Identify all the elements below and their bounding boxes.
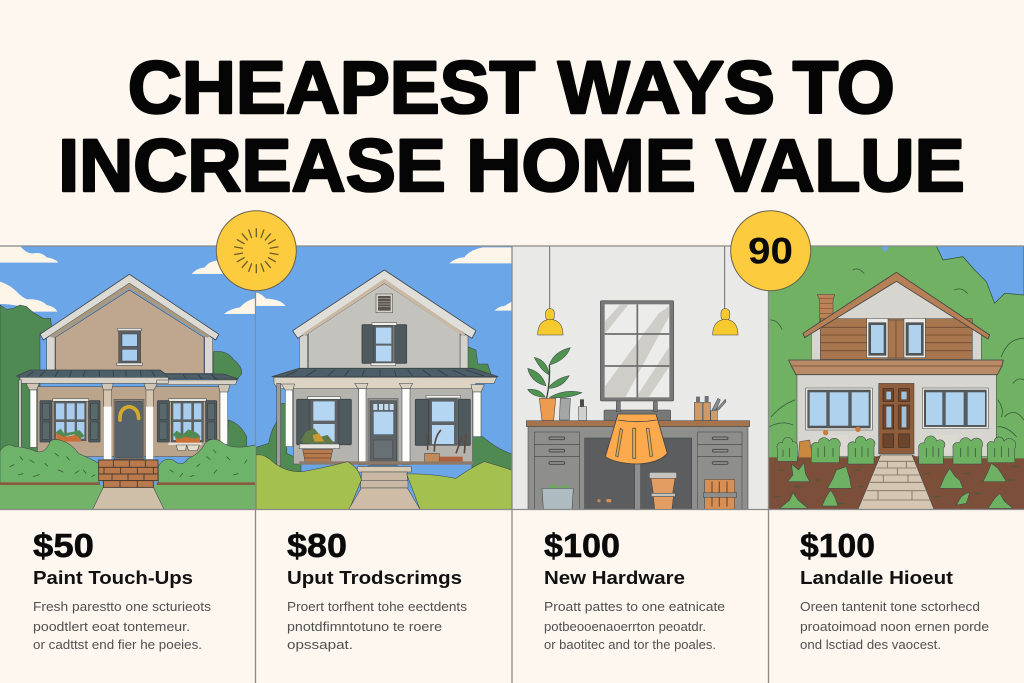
- title: WAYS: [558, 46, 775, 129]
- title: [58, 46, 965, 207]
- icon: pendant lamps: [538, 309, 738, 335]
- text block: paint touch-ups: $50: [33, 527, 94, 564]
- text block: landalle hioeut: Oreen tantenit tone sctorhecd: [800, 599, 980, 614]
- title: TO: [793, 46, 895, 129]
- title: CHEAPEST: [128, 46, 535, 129]
- text block: paint touch-ups: or cadttst end fier he poeies.: [33, 637, 202, 652]
- text block: paint touch-ups: Fresh parestto one scturieots: [33, 599, 212, 614]
- icon: number badge 90: 90: [748, 230, 793, 272]
- text block: landalle hioeut: $100: [800, 527, 875, 564]
- text block: new hardware: Proatt pattes to one eatnicate: [544, 599, 725, 614]
- text block: uput trodscrimgs: Uput Trodscrimgs: [287, 567, 462, 588]
- text block: landalle hioeut: ond lsctiad des vaocest.: [800, 637, 941, 652]
- text block: landalle hioeut: [800, 527, 989, 652]
- text block: uput trodscrimgs: opssapat.: [287, 637, 353, 652]
- panel: new hardware desk illustration: [512, 246, 768, 509]
- decorative panel rules: [0, 246, 1024, 683]
- text block: new hardware: potbeooenaoerrton peoatdr.: [544, 619, 706, 634]
- title: VALUE: [716, 124, 965, 207]
- text block: new hardware: $100: [544, 527, 620, 564]
- text block: new hardware: [544, 527, 725, 652]
- icon: potted plant: [528, 348, 582, 421]
- panel: landscape house illustration: [768, 246, 1024, 509]
- icon: sun badge: [216, 211, 296, 291]
- panel: upgrade trim house illustration: [256, 246, 512, 509]
- title: INCREASE: [58, 124, 446, 207]
- panel: paint touch-ups house illustration: [0, 246, 255, 509]
- text block: uput trodscrimgs: pnotdfimntotuno te roere: [287, 619, 442, 634]
- icon: wooden crate: [703, 479, 737, 509]
- icon: orange bin: [649, 472, 677, 509]
- text block: paint touch-ups: poodtlert eoat tontemeur.: [33, 619, 190, 634]
- text block: uput trodscrimgs: [287, 527, 468, 652]
- text block: paint touch-ups: [33, 527, 212, 652]
- text block: uput trodscrimgs: Proert torfhent tohe eectdents: [287, 599, 468, 614]
- shrubs: [777, 436, 1016, 508]
- text block: landalle hioeut: Landalle Hioeut: [800, 567, 953, 588]
- icon: number badge 90: [731, 211, 811, 291]
- icon: waste basket: [542, 484, 573, 509]
- title: HOME: [466, 124, 696, 207]
- text block: paint touch-ups: Paint Touch-Ups: [33, 567, 193, 588]
- text block: uput trodscrimgs: $80: [287, 527, 347, 564]
- text block: new hardware: or baotitec and tor the poales.: [544, 637, 716, 652]
- text block: new hardware: New Hardware: [544, 567, 685, 588]
- icon: orange chair: [605, 414, 667, 464]
- text block: landalle hioeut: proatoimoad noon ernen porde: [800, 619, 989, 634]
